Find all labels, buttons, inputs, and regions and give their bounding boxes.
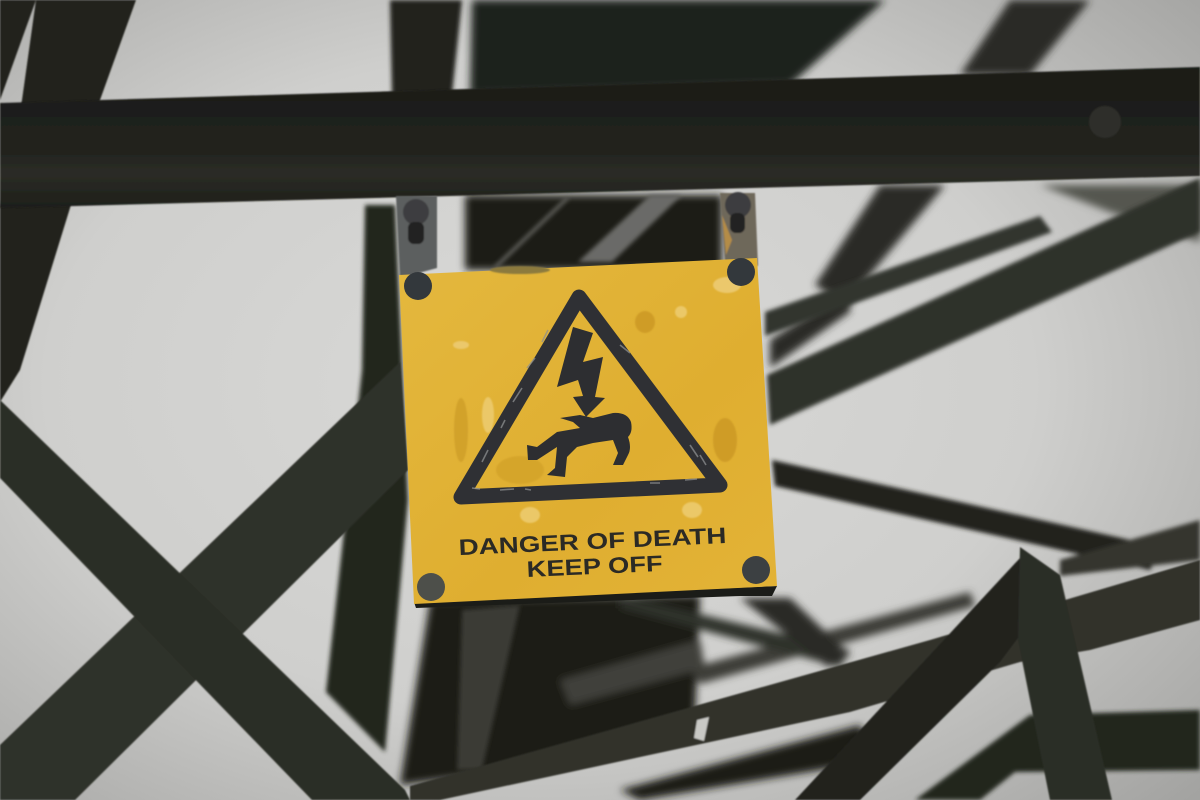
- beam: front falling diagonal: [0, 400, 410, 800]
- beam: top left corner: [0, 0, 36, 100]
- top horizontal beam: [0, 67, 1200, 208]
- triangle paint chips: [472, 330, 706, 490]
- beam: long rising bottom diagonal: [410, 560, 1200, 800]
- panel: yellow warning sign: [399, 258, 777, 608]
- text: danger of death: DANGER OF DEATH: [458, 523, 727, 560]
- beam: spike strut: [1018, 547, 1112, 800]
- icon: falling person: [527, 413, 632, 477]
- far background steel: blurred lattice: [400, 0, 1200, 800]
- sign shadow: [414, 586, 777, 608]
- sign plate: [399, 258, 777, 604]
- left bracket: [396, 196, 437, 278]
- text: keep off: KEEP OFF: [526, 551, 663, 582]
- mounting brackets: [396, 192, 758, 278]
- mid background steel: behind the sign: [326, 0, 1200, 800]
- right bracket: [720, 192, 758, 266]
- steel beams: left lattice: [0, 0, 410, 800]
- text: sign message: [458, 523, 728, 585]
- icon: warning triangle: [461, 297, 720, 497]
- icon: lightning bolt: [557, 327, 605, 417]
- grey reflected strut behind sign: [578, 195, 682, 262]
- beam: rising diagonal: [0, 362, 408, 800]
- icon: corner bolts: [404, 258, 770, 601]
- paint scratch: [694, 717, 709, 741]
- beam: upper left strut: [0, 0, 136, 402]
- icon: bolt on beam: [1089, 106, 1121, 138]
- beam: front angled strut: [795, 558, 1030, 800]
- bottom right beams: [410, 547, 1200, 800]
- paint wear patches: [453, 266, 741, 523]
